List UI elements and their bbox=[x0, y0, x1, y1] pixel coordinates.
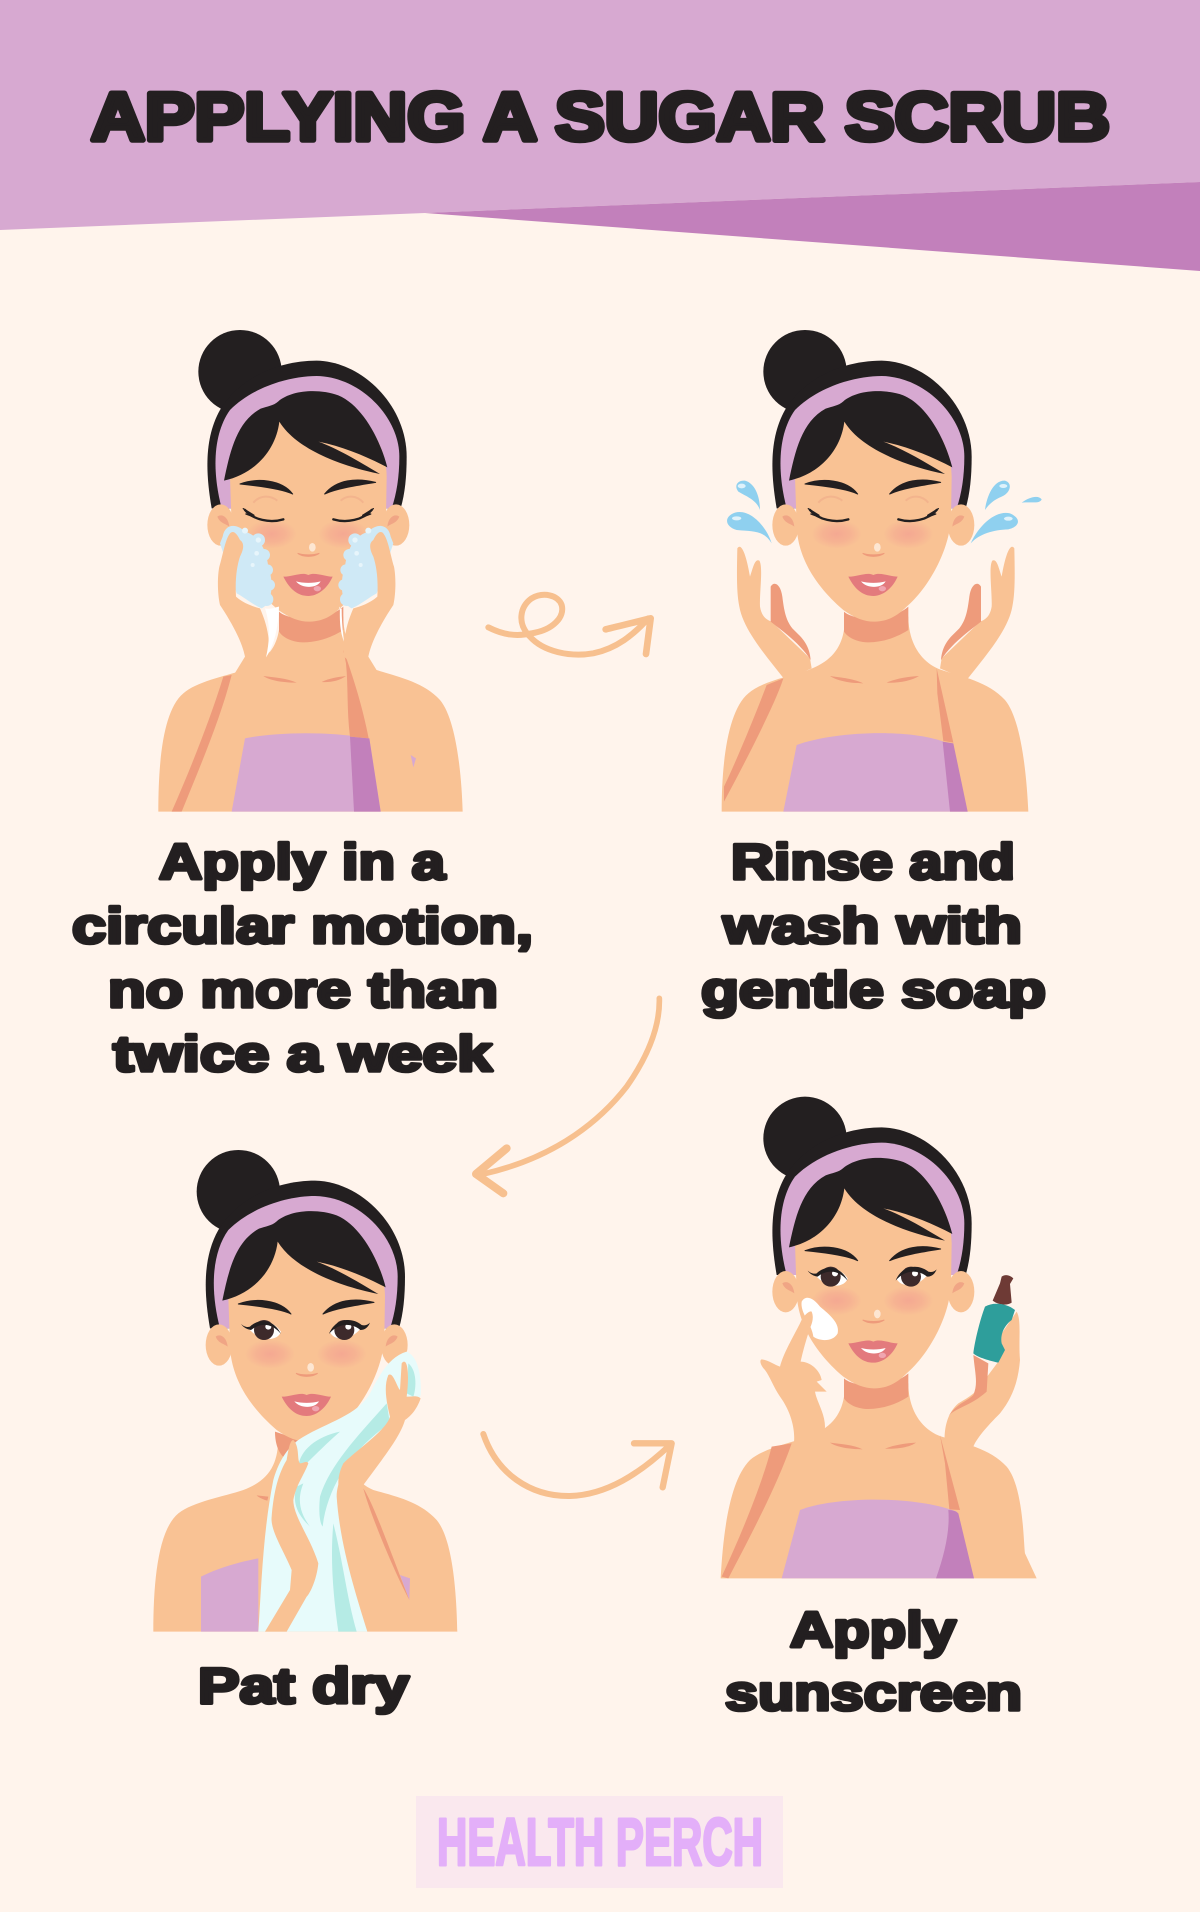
step 2 caption: gentle soap bbox=[701, 962, 1046, 1018]
logo: Health Perch bbox=[416, 1796, 783, 1888]
step 3 caption: Pat dry bbox=[198, 1658, 409, 1714]
left hand holding towel bbox=[265, 1440, 318, 1632]
step 1 caption: twice a week bbox=[113, 1026, 492, 1082]
logo: Health Perch: HEALTH PERCH bbox=[437, 1805, 763, 1880]
foam and right hand bbox=[338, 526, 395, 676]
header banner bbox=[0, 0, 1200, 271]
step 1 caption: circular motion, bbox=[72, 898, 533, 954]
step 4 caption: sunscreen bbox=[725, 1665, 1022, 1721]
left hand bbox=[760, 1311, 827, 1447]
illustration: patting dry with a towel bbox=[153, 1150, 457, 1632]
illustration: applying scrub with both hands bbox=[158, 330, 463, 812]
foam and left hand bbox=[218, 526, 279, 676]
step 2 caption bbox=[701, 834, 1046, 1018]
step 2 caption: wash with bbox=[722, 898, 1022, 954]
arrow: step 1 to step 2 bbox=[488, 595, 651, 655]
step 1 caption bbox=[72, 834, 533, 1082]
water splashes bbox=[727, 481, 1042, 543]
arrow: step 3 to step 4 bbox=[483, 1434, 672, 1496]
sunscreen bottle bbox=[973, 1275, 1015, 1363]
illustration: rinsing with water splashes bbox=[722, 330, 1042, 812]
step 2 caption: Rinse and bbox=[731, 834, 1015, 890]
left hand bbox=[737, 547, 812, 680]
step 4 caption: Apply bbox=[790, 1602, 956, 1658]
illustration: applying sunscreen bbox=[721, 1097, 1037, 1578]
step 1 caption: Apply in a bbox=[159, 834, 446, 890]
step 1 caption: no more than bbox=[108, 962, 498, 1018]
title: APPLYING A SUGAR SCRUB bbox=[91, 79, 1110, 155]
towel bbox=[258, 1352, 421, 1632]
right hand bbox=[940, 547, 1015, 680]
sunscreen foam on cheek bbox=[802, 1298, 838, 1340]
step 4 caption bbox=[725, 1602, 1022, 1721]
right hand bbox=[945, 1312, 1020, 1447]
arrow: step 2 to step 3 bbox=[476, 998, 659, 1193]
right hand holding towel bbox=[338, 1362, 421, 1500]
